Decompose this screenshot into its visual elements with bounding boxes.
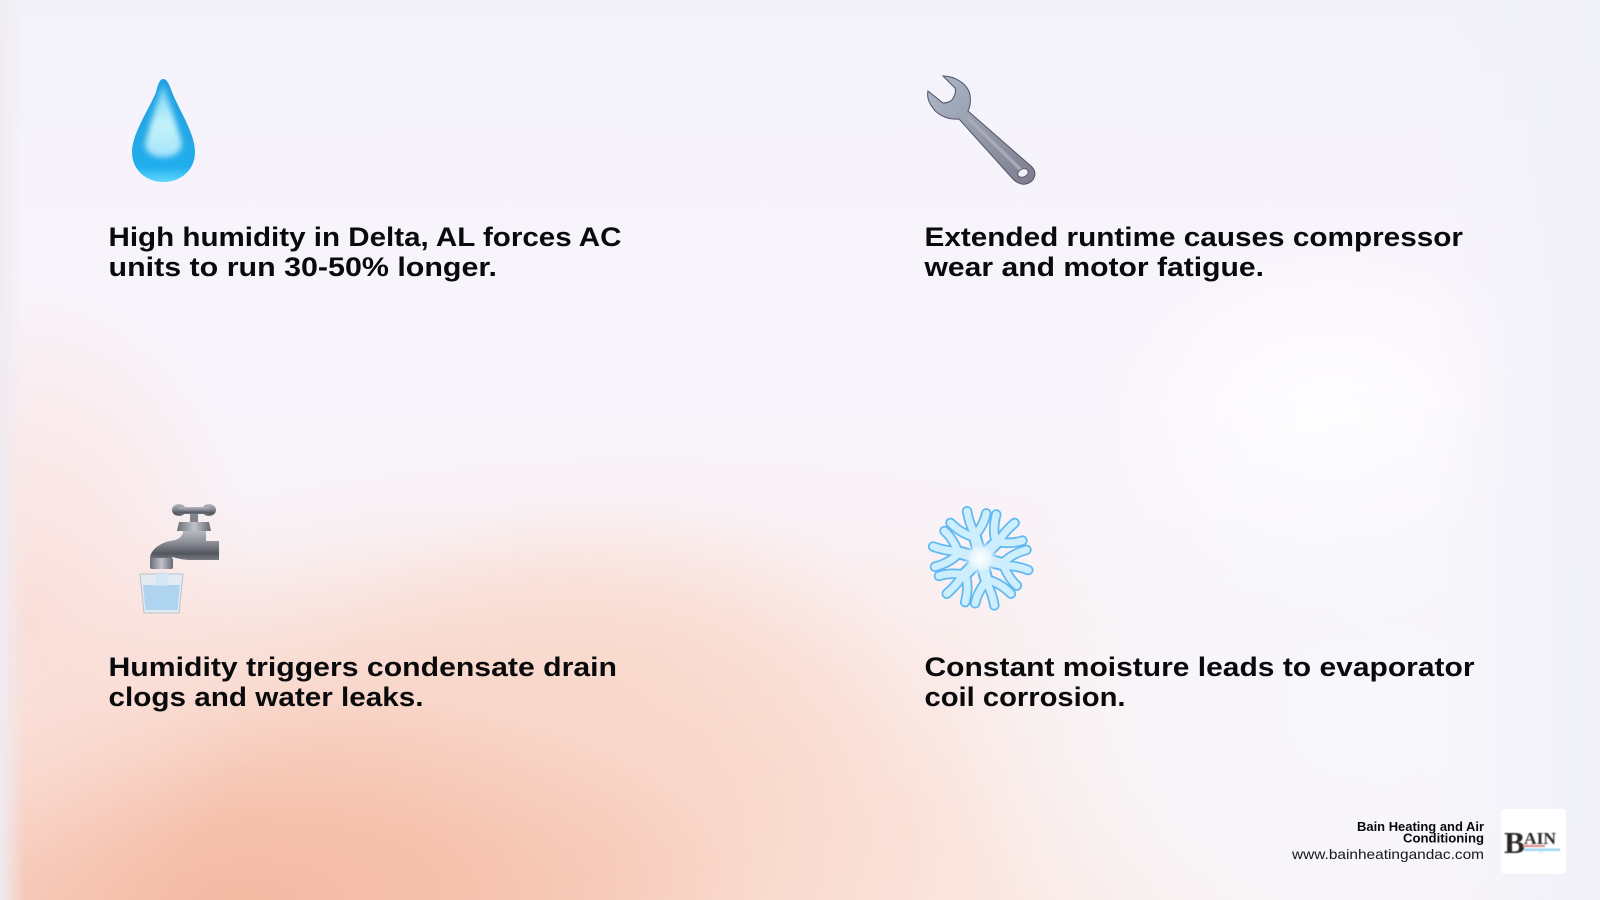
text: condensate statement: clogs and water leaks.	[108, 682, 424, 712]
text: humidity statement: units to run 30-50% longer.	[108, 252, 497, 282]
icon: water drop	[132, 79, 195, 182]
panel: extended runtime	[923, 76, 1464, 282]
icon: faucet with glass	[140, 504, 219, 613]
panel: coil corrosion	[924, 507, 1475, 712]
text: humidity statement	[108, 222, 622, 282]
text: condensate statement	[108, 652, 617, 712]
icon: wrench	[928, 76, 1035, 184]
panel: condensate drain	[108, 504, 617, 712]
company name: Conditioning	[1403, 832, 1484, 846]
text: corrosion statement: coil corrosion.	[924, 682, 1126, 712]
logo: B	[1504, 825, 1525, 860]
text: corrosion statement	[924, 652, 1475, 712]
logo	[1501, 809, 1566, 874]
text: condensate statement: Humidity triggers condensate drain	[108, 652, 617, 682]
logo: AIN	[1524, 829, 1557, 848]
company name: Bain Heating and Air	[1357, 820, 1484, 834]
text: humidity statement: High humidity in Delta, AL forces AC	[108, 222, 622, 252]
text: corrosion statement: Constant moisture leads to evaporator	[924, 652, 1475, 682]
text: runtime statement: Extended runtime causes compressor	[924, 222, 1464, 252]
footer: company brand	[1291, 809, 1566, 874]
panel: high humidity	[108, 79, 622, 282]
website: www.bainheatingandac.com	[1291, 846, 1484, 862]
text: runtime statement: wear and motor fatigue.	[923, 252, 1264, 282]
company name	[1357, 820, 1484, 846]
text: runtime statement	[923, 222, 1464, 282]
icon: snowflake	[928, 507, 1033, 610]
